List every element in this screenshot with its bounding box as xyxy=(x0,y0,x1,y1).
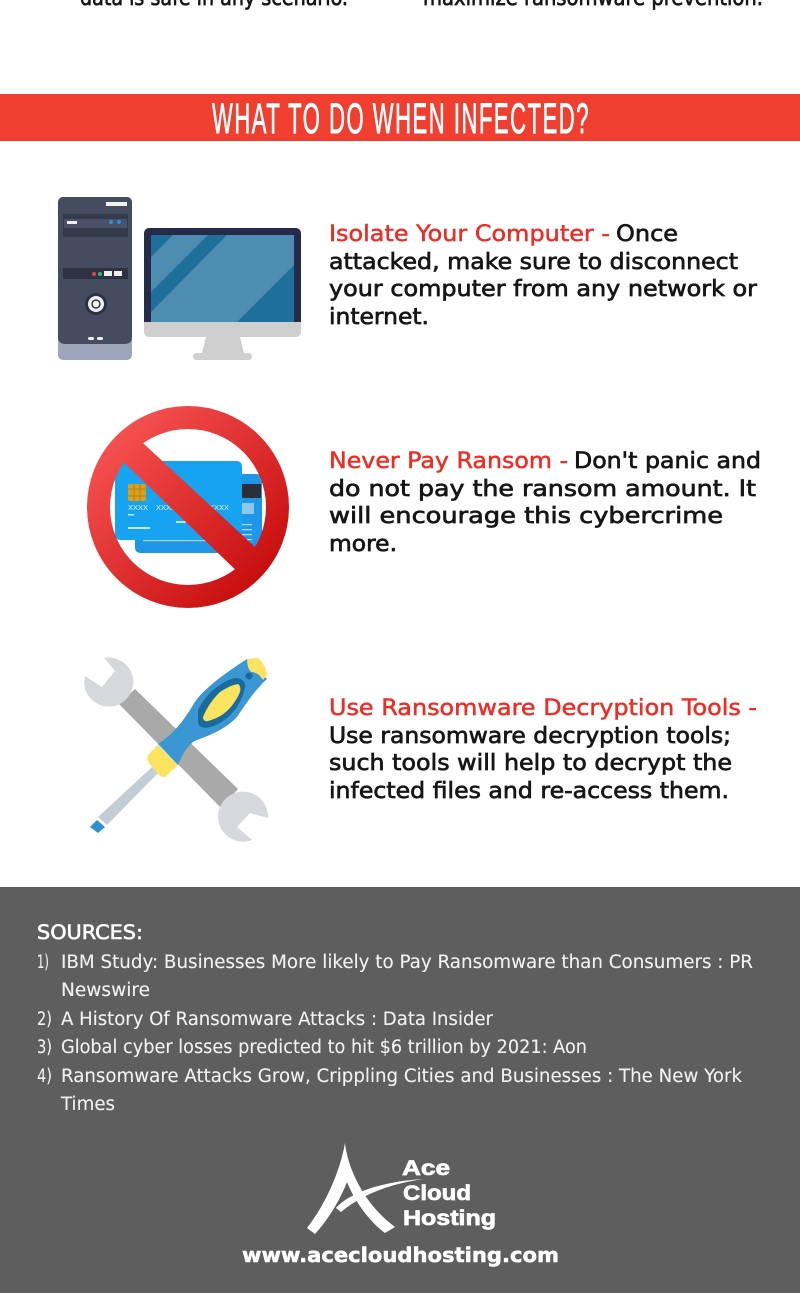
text: sources list: A History Of Ransomware Attacks : Data Insider xyxy=(61,1009,493,1030)
text: sources list: Newswire xyxy=(61,980,150,1001)
text: sources list xyxy=(37,921,753,1115)
panel: footer xyxy=(0,887,800,1293)
text: isolate your computer: internet. xyxy=(329,304,429,330)
icon: front card: XXXX xyxy=(209,503,229,512)
text: never pay ransom: Don't panic and xyxy=(574,448,761,474)
text: isolate your computer: Isolate Your Computer - xyxy=(329,221,610,247)
text: logo wordmark xyxy=(402,1157,496,1230)
text: sources list: IBM Study: Businesses More likely to Pay Ransomware than Consumers : PR xyxy=(61,952,753,973)
text: use ransomware decryption tools: such tools will help to decrypt the xyxy=(329,750,732,776)
text: isolate your computer xyxy=(329,221,758,330)
logo: ace cloud hosting xyxy=(242,1143,559,1267)
icon: logo swoosh xyxy=(336,1179,424,1212)
icon: wrench and screwdriver xyxy=(84,658,268,842)
text: sources list: 1) xyxy=(37,952,49,973)
text: isolate your computer: attacked, make sure to disconnect xyxy=(329,249,738,275)
text: sources list: 4) xyxy=(37,1066,52,1087)
icon: screwdriver xyxy=(90,658,267,833)
text: never pay ransom: more. xyxy=(329,531,397,557)
text: website url: www.acecloudhosting.com xyxy=(242,1243,559,1267)
text: use ransomware decryption tools: Use ransomware decryption tools; xyxy=(329,723,731,749)
icon: front card xyxy=(115,461,242,540)
text: logo wordmark: Ace xyxy=(402,1157,450,1180)
text: never pay ransom: Never Pay Ransom - xyxy=(329,448,568,474)
icon: front card: XXXX xyxy=(128,503,148,512)
text: isolate your computer: your computer from any network or xyxy=(329,276,758,302)
text: sources list: Times xyxy=(60,1094,115,1115)
text: sources list: 2) xyxy=(37,1009,52,1030)
icon: desktop computer xyxy=(58,197,301,360)
text: never pay ransom: do not pay the ransom amount. It xyxy=(329,476,756,502)
text: sources list: Ransomware Attacks Grow, Crippling Cities and Businesses : The New York xyxy=(61,1066,742,1087)
text: use ransomware decryption tools xyxy=(329,695,757,804)
icon: red prohibition sign xyxy=(98,418,278,596)
text: isolate your computer: Once xyxy=(616,221,678,247)
text: sources list: SOURCES: xyxy=(37,921,143,944)
text: sources list: Global cyber losses predicted to hit $6 trillion by 2021: Aon xyxy=(61,1037,587,1058)
icon: monitor xyxy=(144,228,301,360)
text: logo wordmark: Cloud xyxy=(403,1182,471,1205)
icon: front card: XXXX xyxy=(156,503,176,512)
text: use ransomware decryption tools: Use Ransomware Decryption Tools - xyxy=(329,695,757,721)
icon: computer tower xyxy=(58,197,132,360)
text: cropped tips from previous section xyxy=(80,0,763,11)
text: logo wordmark: Hosting xyxy=(403,1207,496,1230)
icon: prohibited credit cards xyxy=(98,418,278,596)
icon: back card xyxy=(135,474,262,553)
text: never pay ransom xyxy=(329,448,761,557)
icon: logo letter A xyxy=(307,1143,395,1234)
text: never pay ransom: will encourage this cybercrime xyxy=(329,503,723,529)
text: sources list: 3) xyxy=(37,1037,52,1058)
text: use ransomware decryption tools: infected files and re-access them. xyxy=(329,778,729,804)
icon: wrench xyxy=(84,658,268,842)
